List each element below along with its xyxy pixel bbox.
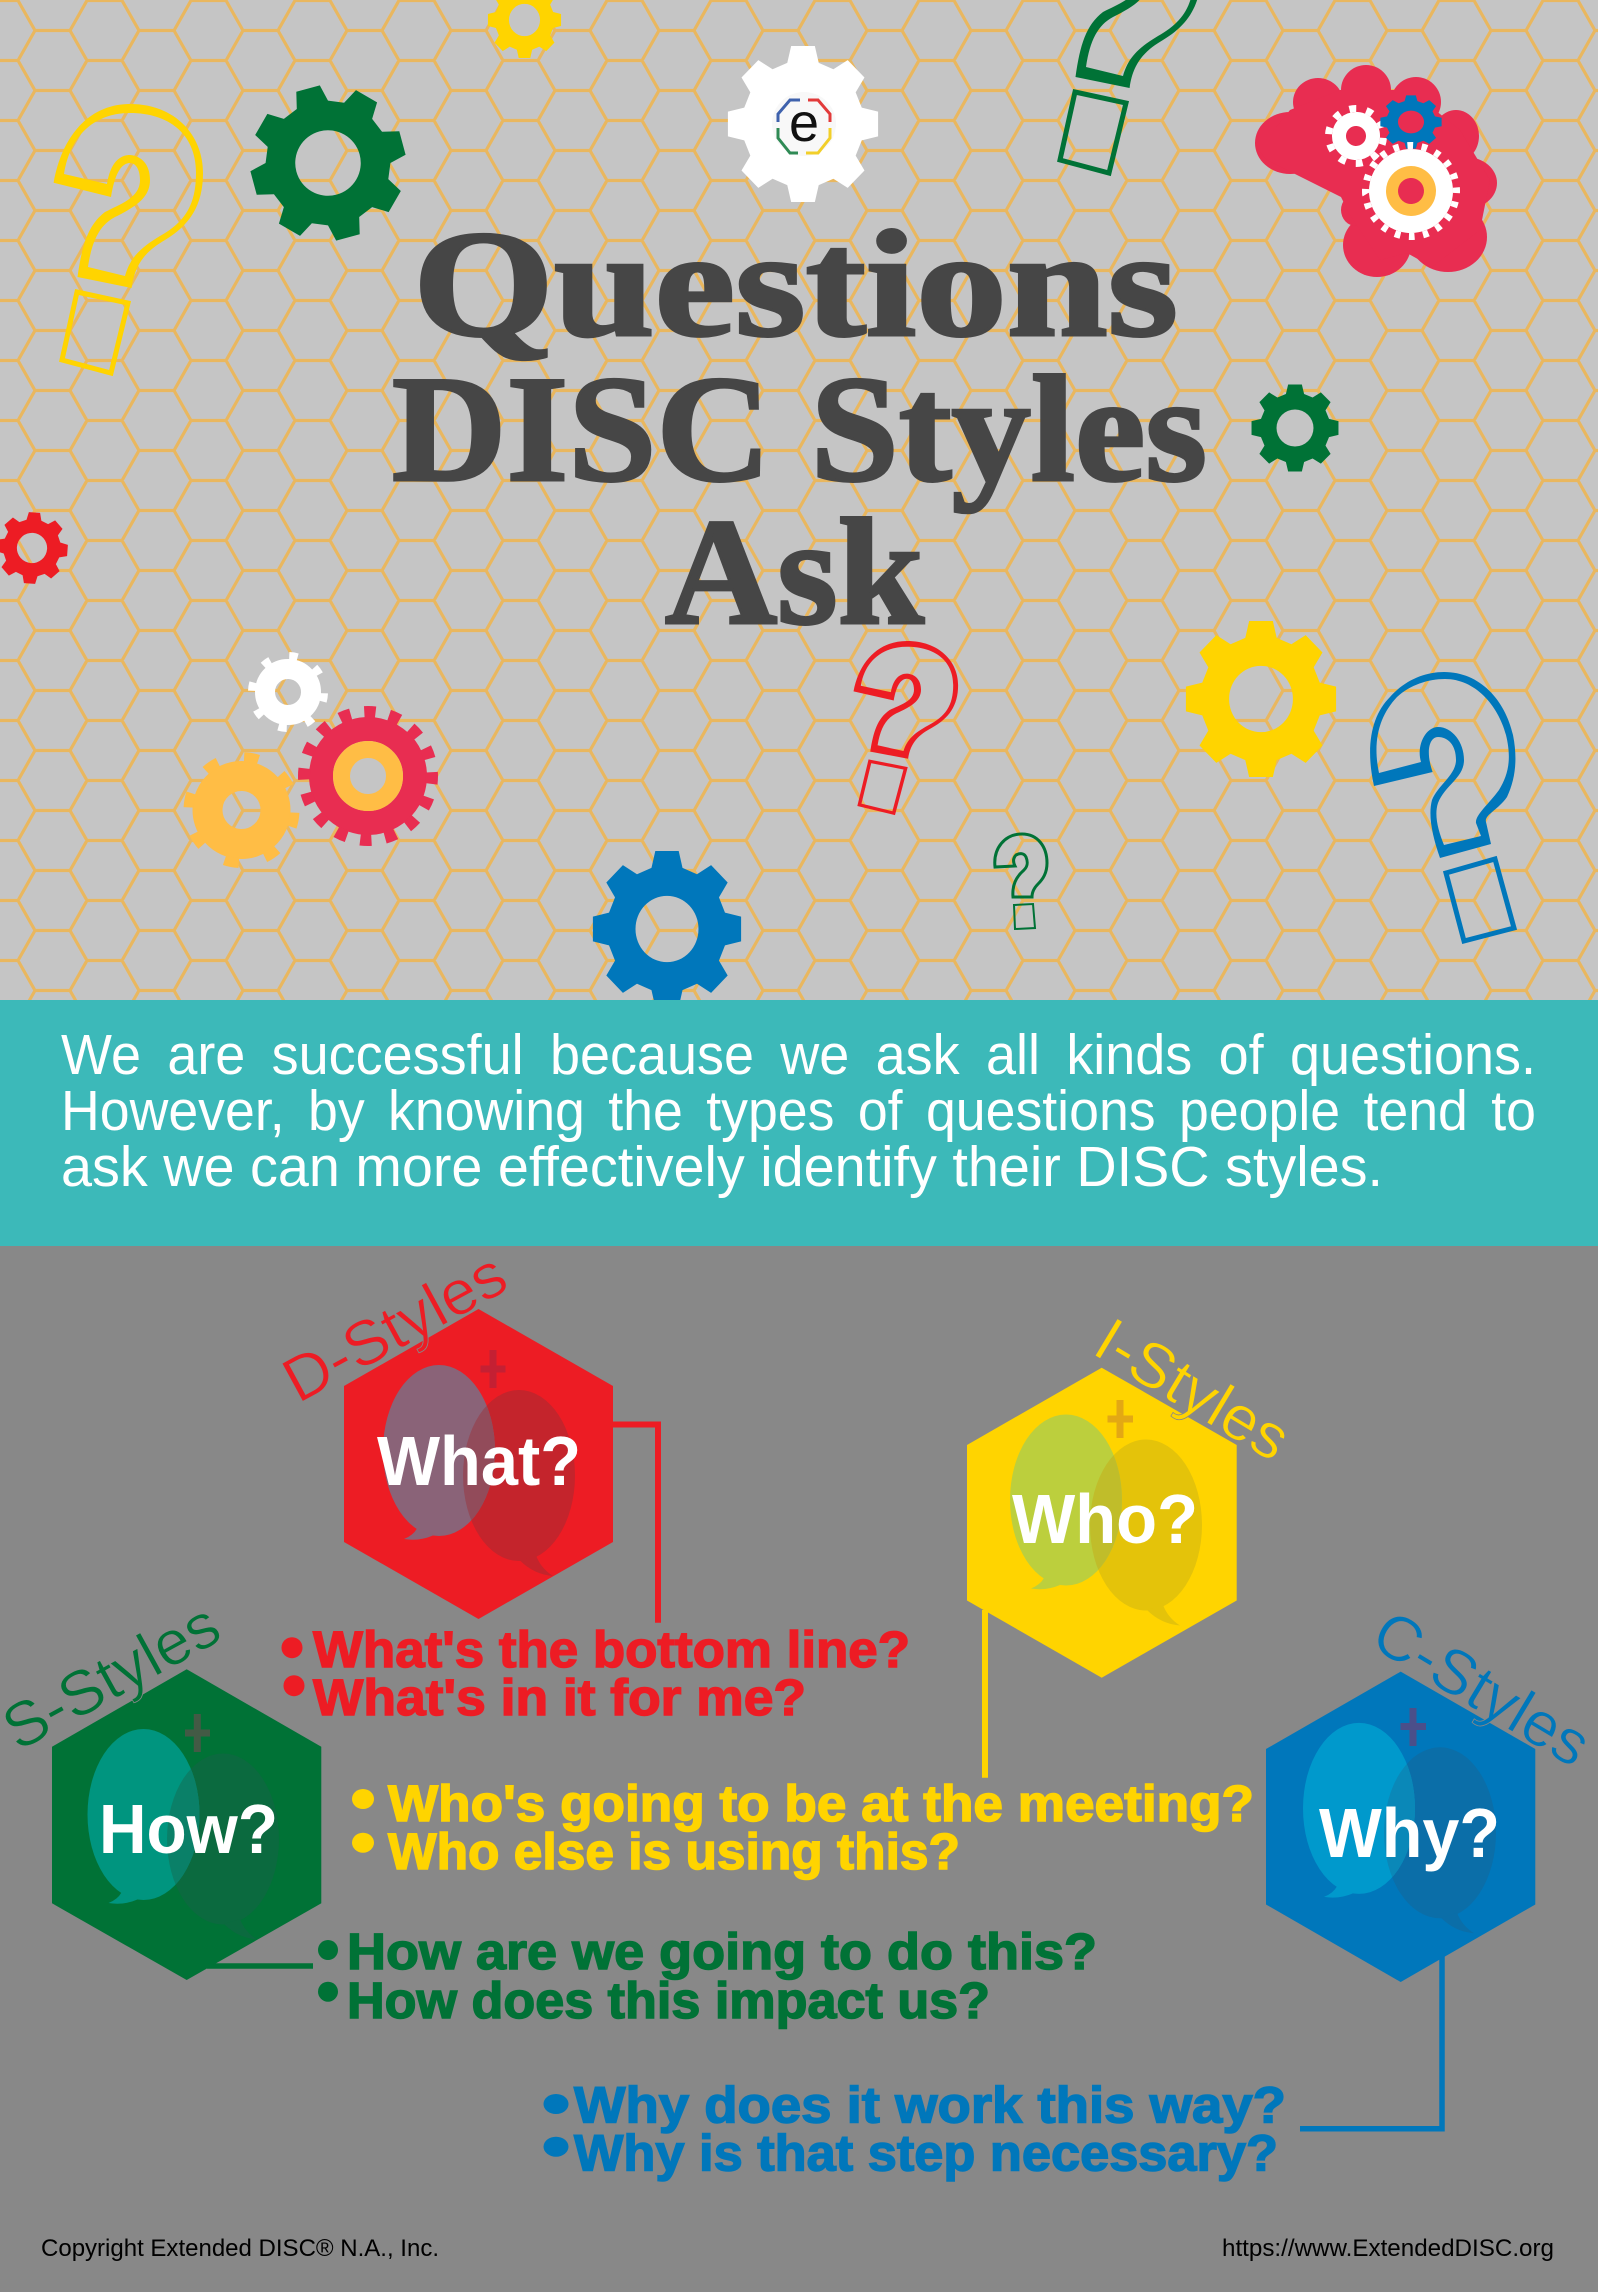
panel: header with honeycomb background bbox=[0, 0, 1598, 1007]
label: C-Styles: C-Styles bbox=[1361, 1597, 1598, 1781]
icon: red question mark bbox=[854, 641, 958, 813]
connector: I-style bbox=[982, 1610, 988, 1778]
list: I-style questions bbox=[352, 1775, 1254, 1880]
connector: C-style bbox=[1300, 1956, 1442, 2129]
icon: plus D bbox=[480, 1350, 506, 1388]
icon: small green question mark bbox=[995, 834, 1047, 929]
label: What?: What? bbox=[377, 1422, 581, 1500]
footer: copyright: Copyright Extended DISC® N.A., Inc. bbox=[41, 2235, 439, 2262]
title: DISC Styles bbox=[392, 345, 1207, 513]
icon: speech bubbles S bbox=[88, 1729, 279, 1940]
list: C-style questions: Why is that step necessary? bbox=[574, 2125, 1278, 2182]
icon: yellow question mark bbox=[54, 104, 203, 373]
icon: red gear on left edge bbox=[0, 510, 70, 586]
icon: plus I bbox=[1108, 1400, 1133, 1438]
icon: blue gear at bottom bbox=[593, 851, 741, 1007]
icon: plus S bbox=[185, 1714, 210, 1752]
list: C-style questions bbox=[544, 2077, 1286, 2182]
panel: intro band bbox=[0, 1000, 1598, 1246]
icon: plus C bbox=[1400, 1708, 1426, 1746]
text block: intro: However, by knowing the types of questions people tend to bbox=[61, 1079, 1536, 1143]
icon: green question mark cut by top edge bbox=[1052, 0, 1201, 173]
list: S-style questions: How does this impact us? bbox=[347, 1972, 990, 2029]
list: C-style questions: Why does it work this way? bbox=[574, 2077, 1286, 2134]
icon: speech bubbles C bbox=[1303, 1723, 1496, 1933]
icon: speech bubbles I bbox=[1010, 1414, 1202, 1626]
icon: white gear with logo: e bbox=[789, 93, 819, 153]
list: S-style questions bbox=[318, 1923, 1097, 2029]
label: D-Styles: D-Styles bbox=[271, 1239, 518, 1416]
title bbox=[392, 200, 1207, 656]
connector: D-style bbox=[613, 1424, 658, 1623]
icon: white gear with logo bbox=[728, 46, 878, 202]
connector: S-style bbox=[207, 1963, 313, 1969]
label: Why?: Why? bbox=[1319, 1794, 1500, 1872]
list: D-style questions: What's in it for me? bbox=[313, 1669, 806, 1726]
icon: large green gear bbox=[234, 69, 422, 257]
title: Questions bbox=[413, 200, 1178, 368]
icon: large yellow gear on right bbox=[1186, 621, 1336, 777]
text block: intro bbox=[61, 1023, 1536, 1199]
title: Ask bbox=[665, 488, 924, 656]
icon: speech bubbles D bbox=[383, 1365, 575, 1576]
panel: S style hexagon bbox=[0, 1589, 321, 1980]
list: I-style questions: Who's going to be at the meeting? bbox=[388, 1775, 1254, 1832]
label: How?: How? bbox=[99, 1790, 278, 1868]
text block: intro: We are successful because we ask all kinds of questions. bbox=[61, 1023, 1536, 1087]
footer: website: https://www.ExtendedDISC.org bbox=[1222, 2235, 1554, 2262]
panel: D style hexagon bbox=[271, 1239, 613, 1619]
panel: DISC styles area bbox=[0, 1239, 1598, 2292]
icon: green gear on right bbox=[1252, 385, 1338, 471]
icon: small yellow gear at top bbox=[488, 0, 561, 58]
text block: intro: ask we can more effectively identify their DISC styles. bbox=[61, 1135, 1383, 1199]
icon: red gear with yellow ring bbox=[301, 709, 435, 843]
icon: red flower head with gears bbox=[1255, 65, 1497, 277]
icon: orange gear in lower-left cluster bbox=[186, 754, 297, 866]
list: D-style questions bbox=[282, 1621, 910, 1726]
icon: white gear in flower bbox=[1327, 107, 1385, 165]
label: I-Styles: I-Styles bbox=[1083, 1305, 1302, 1475]
icon: large white gear with yellow ring in flower bbox=[1362, 142, 1460, 240]
panel: I style hexagon bbox=[967, 1305, 1302, 1678]
icon: blue gear in flower bbox=[1380, 95, 1442, 149]
icon: blue question mark bbox=[1370, 672, 1515, 941]
list: S-style questions: How are we going to do this? bbox=[347, 1923, 1097, 1980]
panel: C style hexagon bbox=[1266, 1597, 1598, 1982]
label: Who?: Who? bbox=[1012, 1480, 1198, 1558]
icon: white gear in lower-left cluster bbox=[251, 655, 325, 729]
list: D-style questions: What's the bottom line? bbox=[313, 1621, 910, 1678]
list: I-style questions: Who else is using this? bbox=[388, 1823, 960, 1880]
